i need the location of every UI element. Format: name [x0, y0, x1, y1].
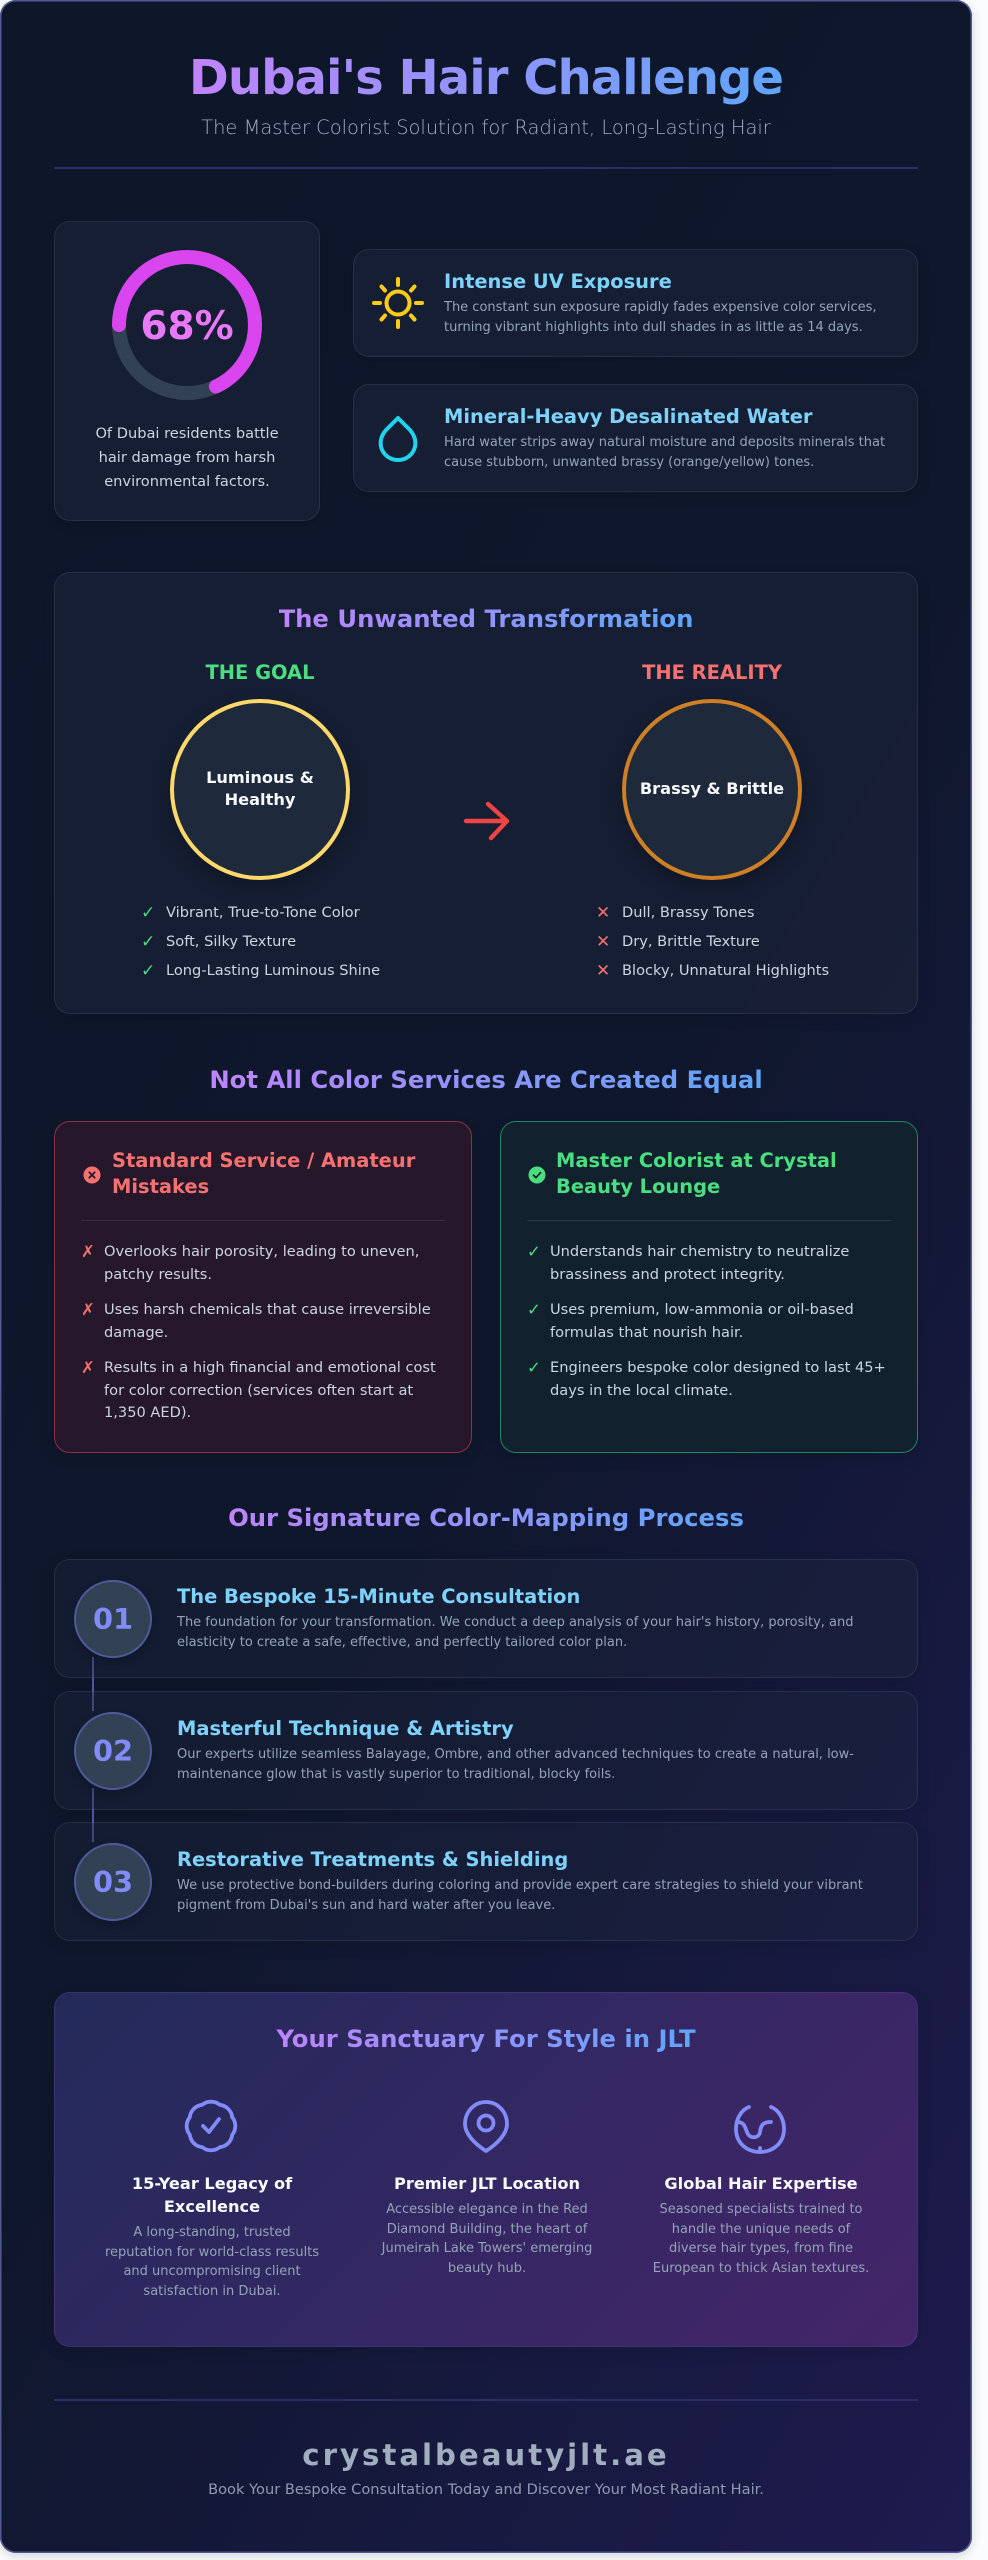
list of mistakes: ✗: [81, 1242, 95, 1261]
step title: The Bespoke 15-Minute Consultation: [177, 1585, 580, 1608]
feature description: A long-standing, trusted: [133, 2225, 291, 2240]
section heading: process: Our Signature Color-Mapping Process: [228, 1503, 744, 1532]
step description: Our experts utilize seamless Balayage, Ombre, and other advanced techniques to create a natural, low-: [177, 1747, 854, 1762]
step description: We use protective bond-builders during coloring and provide expert care strategies to shield your vibrant: [177, 1878, 863, 1893]
icon: map pin: [463, 2100, 509, 2153]
reality problems list: Dry, Brittle Texture: [622, 933, 760, 950]
feature title: 15-Year Legacy of: [132, 2174, 292, 2193]
step description: maintenance glow that is vastly superior to traditional, blocky foils.: [177, 1767, 615, 1782]
goal benefits list: [141, 903, 380, 981]
card description: The constant sun exposure rapidly fades expensive color services,: [444, 300, 877, 315]
header subtitle: The Master Colorist Solution for Radiant, Long-Lasting Hair: [201, 116, 771, 139]
card title: Mineral-Heavy Desalinated Water: [444, 405, 812, 428]
step number 03: 03: [93, 1865, 133, 1899]
statistic caption: [95, 425, 279, 490]
step number 01: [74, 1580, 152, 1658]
list of strengths: Engineers bespoke color designed to last 45+: [550, 1359, 886, 1376]
donut chart: 68%: [112, 250, 262, 400]
list of strengths: ✓: [527, 1300, 541, 1319]
connector between steps 2 and 3: [92, 1788, 94, 1842]
panel: desalinated water: [353, 384, 918, 492]
card description: [444, 435, 885, 470]
connector between steps 1 and 2: [92, 1657, 94, 1711]
list of mistakes: Overlooks hair porosity, leading to uneven,: [104, 1243, 419, 1260]
list of strengths: Uses premium, low-ammonia or oil-based: [550, 1301, 854, 1318]
section heading: The Unwanted Transformation: [279, 604, 693, 633]
list of mistakes: ✗: [81, 1300, 95, 1319]
section heading: comparison: Not All Color Services Are Created Equal: [209, 1065, 763, 1094]
feature description: satisfaction in Dubai.: [143, 2284, 281, 2299]
reality circle: Brassy & Brittle: [640, 779, 784, 798]
list of mistakes: Results in a high financial and emotional cost: [104, 1359, 436, 1376]
panel: the unwanted transformation: [54, 572, 918, 1014]
step title: Restorative Treatments & Shielding: [177, 1848, 568, 1871]
reality problems list: ✕: [596, 932, 610, 952]
card description: Hard water strips away natural moisture and deposits minerals that: [444, 435, 885, 450]
footer call to action: Book Your Bespoke Consultation Today and Discover Your Most Radiant Hair.: [208, 2481, 764, 2498]
list of mistakes: ✗: [81, 1358, 95, 1377]
list of strengths: ✓: [527, 1242, 541, 1261]
list of mistakes: 1,350 AED).: [104, 1404, 191, 1421]
arrow: goal to reality: [464, 802, 510, 840]
goal circle: Healthy: [225, 790, 295, 809]
card heading: [112, 1149, 416, 1198]
feature title: Premier JLT Location: [394, 2174, 580, 2193]
feature description: Seasoned specialists trained to: [659, 2202, 862, 2217]
goal circle: [170, 699, 350, 880]
card title: Intense UV Exposure: [444, 270, 672, 293]
reality circle: [622, 699, 802, 880]
step number 03: [74, 1843, 152, 1921]
reality problems list: ✕: [596, 903, 610, 923]
feature title: Excellence: [164, 2197, 260, 2216]
feature description: [105, 2225, 319, 2299]
panel: master colorist: [500, 1121, 918, 1453]
step number 01: 01: [93, 1602, 133, 1636]
card heading: Standard Service / Amateur: [112, 1149, 415, 1172]
feature title: [132, 2174, 292, 2216]
card description: cause stubborn, unwanted brassy (orange/yellow) tones.: [444, 455, 814, 470]
goal benefits list: Soft, Silky Texture: [166, 933, 296, 950]
icon: water drop: [378, 416, 418, 462]
card heading: Beauty Lounge: [556, 1175, 720, 1198]
section heading: Your Sanctuary For Style in JLT: [276, 2024, 696, 2053]
reality problems list: ✕: [596, 961, 610, 981]
feature description: Accessible elegance in the Red: [386, 2202, 588, 2217]
feature description: [380, 2202, 592, 2276]
panel: 68% statistic: [54, 221, 320, 521]
goal benefits list: Long-Lasting Luminous Shine: [166, 962, 380, 979]
feature description: beauty hub.: [448, 2261, 526, 2276]
statistic caption: hair damage from harsh: [99, 449, 275, 466]
feature title: Global Hair Expertise: [664, 2174, 858, 2193]
panel: step 1: [54, 1559, 918, 1678]
feature: legacy: [105, 2100, 319, 2299]
feature description: European to thick Asian textures.: [653, 2261, 869, 2276]
goal benefits list: ✓: [141, 961, 155, 981]
reality label: THE REALITY: [642, 661, 782, 684]
feature description: and uncompromising client: [123, 2264, 301, 2279]
panel: UV exposure: [353, 249, 918, 357]
step title: Masterful Technique & Artistry: [177, 1717, 514, 1740]
goal benefits list: ✓: [141, 903, 155, 923]
icon: sun: [372, 277, 424, 329]
goal circle: Luminous &: [206, 768, 314, 787]
feature description: Jumeirah Lake Towers' emerging: [382, 2241, 592, 2256]
statistic caption: environmental factors.: [104, 473, 270, 490]
panel: step 3: [54, 1822, 918, 1941]
feature description: handle the unique needs of: [672, 2222, 850, 2237]
step number 02: [74, 1712, 152, 1790]
step description: [176, 1615, 854, 1650]
step description: pigment from Dubai's sun and hard water after you leave.: [177, 1898, 555, 1913]
statistic caption: Of Dubai residents battle: [95, 425, 279, 442]
goal benefits list: Vibrant, True-to-Tone Color: [166, 904, 360, 921]
card heading: [556, 1149, 837, 1198]
goal label: THE GOAL: [206, 661, 314, 684]
step number 02: 02: [93, 1734, 133, 1768]
feature description: [653, 2202, 869, 2276]
reality problems list: Blocky, Unnatural Highlights: [622, 962, 829, 979]
footer website: crystalbeautyjlt.ae: [302, 2438, 670, 2472]
list of mistakes: Uses harsh chemicals that cause irreversible: [104, 1301, 431, 1318]
feature: location: [380, 2100, 592, 2276]
panel: sanctuary: [54, 1992, 918, 2347]
list of strengths: brassiness and protect integrity.: [550, 1266, 785, 1282]
feature description: diverse hair types, from fine: [669, 2241, 853, 2256]
step description: [177, 1747, 854, 1782]
icon: cross badge: [84, 1166, 100, 1184]
list of strengths: days in the local climate.: [550, 1382, 733, 1398]
list of strengths: ✓: [527, 1358, 541, 1377]
card description: turning vibrant highlights into dull shades in as little as 14 days.: [444, 320, 863, 335]
panel: standard service: [54, 1121, 472, 1453]
feature: global expertise: [653, 2105, 869, 2276]
list of mistakes: for color correction (services often start at: [104, 1382, 413, 1398]
list of mistakes: [81, 1242, 436, 1421]
icon: check badge: [528, 1166, 546, 1184]
list of strengths: formulas that nourish hair.: [550, 1324, 743, 1340]
card description: [444, 300, 877, 335]
icon: hair strand: [734, 2105, 786, 2154]
reality problems list: Dull, Brassy Tones: [622, 904, 755, 921]
feature description: Diamond Building, the heart of: [387, 2222, 587, 2237]
panel: step 2: [54, 1691, 918, 1810]
reality problems list: [596, 903, 829, 981]
icon: badge check: [184, 2100, 238, 2152]
header title: Dubai's Hair Challenge: [189, 50, 783, 106]
donut chart: 68%: 68%: [140, 304, 234, 349]
feature description: reputation for world-class results: [105, 2245, 319, 2260]
card heading: Master Colorist at Crystal: [556, 1149, 837, 1172]
list of mistakes: patchy results.: [104, 1266, 212, 1282]
step description: [177, 1878, 863, 1913]
goal benefits list: ✓: [141, 932, 155, 952]
list of strengths: [527, 1242, 886, 1398]
list of strengths: Understands hair chemistry to neutralize: [550, 1243, 849, 1260]
card heading: Mistakes: [112, 1175, 209, 1198]
step description: The foundation for your transformation. We conduct a deep analysis of your hair's history, porosity, and: [177, 1615, 854, 1630]
step description: elasticity to create a safe, effective, and perfectly tailored color plan.: [177, 1635, 627, 1650]
list of mistakes: damage.: [104, 1324, 168, 1340]
